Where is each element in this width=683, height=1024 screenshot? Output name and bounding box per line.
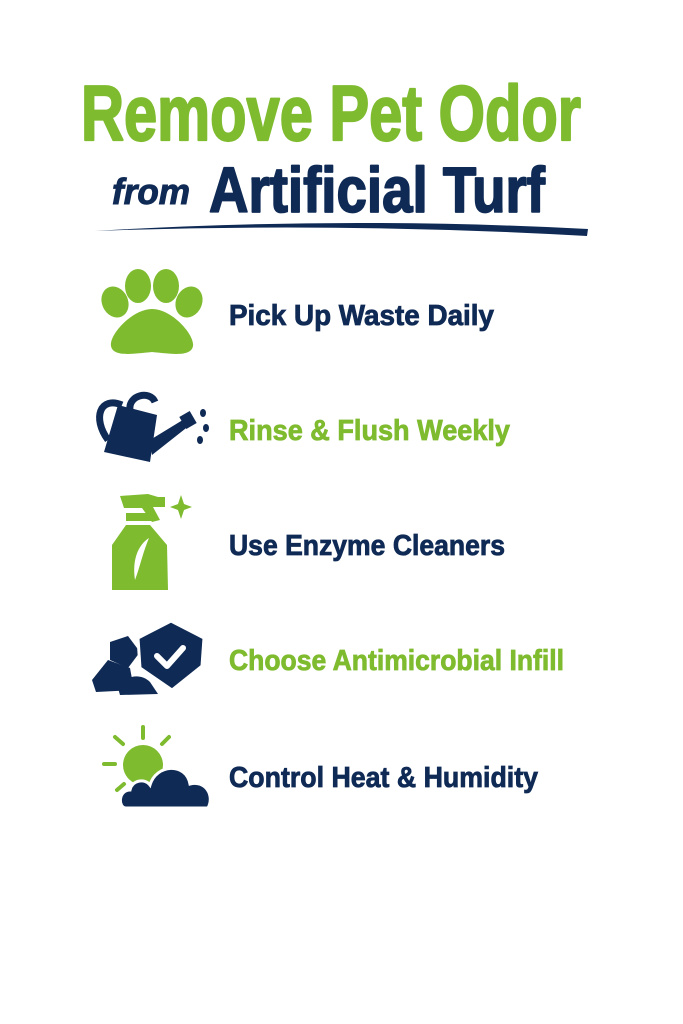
title line 2: Artificial Turf — [209, 154, 546, 226]
label 5: Control Heat & Humidity — [229, 762, 538, 794]
title line 2: from — [112, 171, 190, 212]
title line 2 — [112, 154, 546, 226]
label 3: Use Enzyme Cleaners — [229, 530, 505, 562]
label 1: Pick Up Waste Daily — [229, 300, 494, 332]
icon: infill stones with shield — [92, 621, 204, 695]
swoosh underline — [95, 223, 588, 236]
icon: spray bottle — [112, 494, 192, 590]
icon: paw — [96, 269, 208, 354]
label 2: Rinse & Flush Weekly — [229, 415, 510, 447]
icon: watering can — [100, 395, 209, 462]
label 4: Choose Antimicrobial Infill — [229, 645, 564, 677]
icon: sun and cloud — [104, 727, 210, 808]
